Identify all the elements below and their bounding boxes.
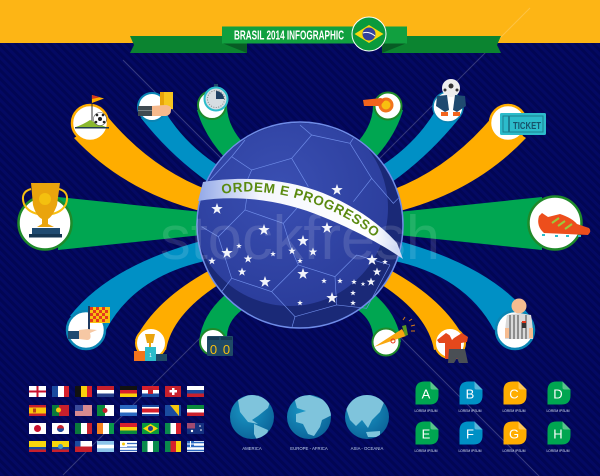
icon: referee [505,298,533,339]
title: BRASIL 2014 INFOGRAPHIC [234,28,344,42]
tile A [414,382,438,413]
arm: referee [390,240,534,349]
label: ASIA - OCEANIA [351,446,383,451]
tile E [414,422,438,453]
flags row 4 [29,441,204,452]
sash [198,179,403,259]
icon: scoreboard: 0 [223,342,230,357]
icon: stopwatch [204,84,228,110]
arm: podium [134,270,218,361]
tile G: LOREM IPSUM [502,449,526,453]
label: EUROPE - AFRICA [290,446,328,451]
stars [208,184,388,305]
tile C [502,382,526,413]
icon: scoreboard: 0 [210,342,217,357]
tile B: B [466,386,474,402]
icon: scoreboard [207,336,233,357]
title ribbon [130,17,501,53]
arm: scoreboard [199,295,242,357]
tile B: LOREM IPSUM [458,409,482,413]
tile G [502,422,526,453]
arm: linesman flag [67,240,210,349]
icon: Brazil flag badge [352,17,386,51]
arm: trophy [18,183,202,250]
tile E: LOREM IPSUM [414,449,438,453]
globe: Europe - Africa [287,395,332,451]
motto: ORDEM E PROGRESSO [222,182,378,236]
flags row 3 [29,423,204,434]
globe: Asia - Oceania [345,394,389,451]
tile F [458,422,482,453]
tile A: LOREM IPSUM [414,409,438,413]
tile C: LOREM IPSUM [502,409,526,413]
tile D: LOREM IPSUM [546,409,570,413]
header band [0,0,600,43]
icon: shirt and shorts [437,333,468,363]
tile C: C [509,386,519,402]
icon: whistle [363,98,394,112]
arm: corner flag [72,95,208,212]
tile H [546,422,570,453]
tile A: A [422,386,431,402]
label: AMERICA [242,446,262,451]
tile F: F [466,426,474,442]
arm: ticket [392,105,546,212]
arm: whistle [355,92,403,158]
icon: ticket [500,113,546,135]
legend tiles [414,382,570,453]
ribbon tails [130,36,501,53]
arm: kit [382,270,468,363]
icon: megaphone [374,317,415,347]
soccer ball with Brazilian flag design [196,121,404,329]
watermark: stockfresh [160,204,440,273]
tile H: LOREM IPSUM [546,449,570,453]
tile H: H [553,426,563,442]
tile E: E [422,426,431,442]
ball body [197,122,403,328]
tile D: D [553,386,563,402]
arm: stopwatch [197,84,245,158]
globe: America [230,394,274,451]
tile G: G [509,426,519,442]
icon: corner flag and ball [75,95,109,128]
icon: gloves and ball [436,79,466,116]
arm: goalkeeper gloves [378,79,466,182]
tile F: LOREM IPSUM [458,449,482,453]
tile D [546,382,570,413]
arm: football boot [398,196,590,250]
watermark lines [63,8,540,476]
flags row 1 [29,386,204,397]
flags grid [29,386,204,452]
icon: gold trophy [23,183,67,238]
icon: football boot [538,213,590,237]
tile B [458,382,482,413]
ball panel seams [202,125,398,328]
icon: ticket: TICKET [513,120,541,132]
ribbon centre [222,26,407,44]
icon: hand with checkered flag [68,306,110,340]
flags row 2 [29,405,204,416]
icon: podium with trophy: 1 [149,353,152,359]
icon: hand with yellow card [138,92,173,116]
arm: megaphone [358,295,415,356]
arm: yellow card [138,92,222,182]
